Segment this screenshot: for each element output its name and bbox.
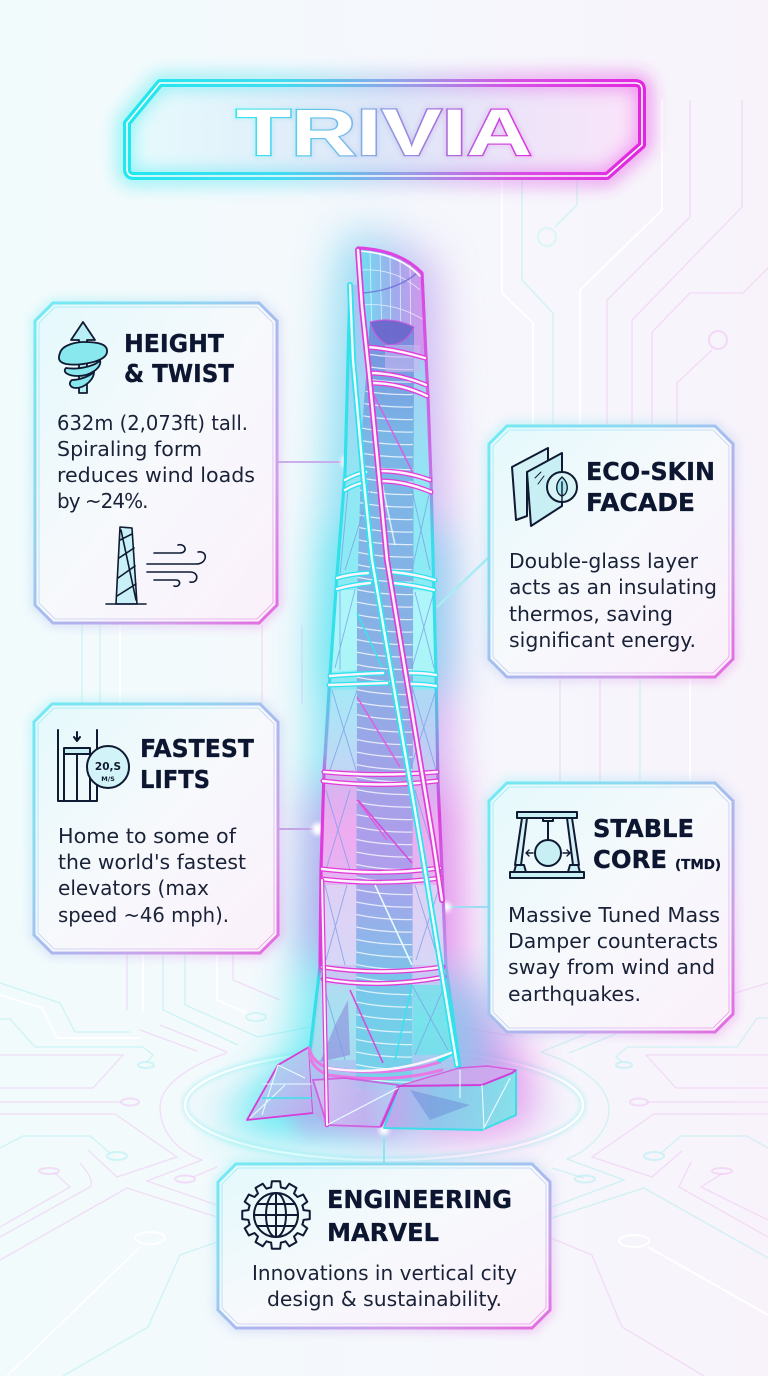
body text [57, 411, 255, 513]
tower illustration [247, 247, 516, 1130]
icon: double glass with leaf [512, 448, 577, 526]
body text: reduces wind loads [57, 463, 255, 487]
tower crown lattice [362, 250, 424, 350]
heading: & TWIST [124, 359, 234, 388]
body text: Damper counteracts [508, 929, 718, 953]
banner frame [127, 83, 642, 176]
heading [586, 457, 715, 517]
body text: design & sustainability. [267, 1287, 502, 1311]
tower crown [358, 248, 426, 357]
tower central core [356, 320, 414, 1090]
panel: height and twist [35, 303, 277, 623]
front base [313, 1078, 398, 1127]
icon: elevator and gauge: 20,S [95, 761, 121, 773]
body text: 632m (2,073ft) tall. [57, 411, 248, 435]
heading [140, 734, 254, 794]
heading: CORE [593, 845, 667, 874]
title banner [125, 81, 644, 178]
body text: significant energy. [509, 628, 696, 652]
core floor stripes [356, 345, 413, 1090]
body text: Innovations in vertical city [252, 1261, 517, 1285]
heading: STABLE [593, 814, 694, 843]
heading [327, 1185, 512, 1247]
body text [58, 824, 246, 927]
tower neon glow [247, 247, 516, 1135]
icon: elevator and gauge: M/S [101, 775, 115, 783]
heading [124, 329, 234, 388]
panel: eco-skin facade [489, 426, 733, 677]
heading: FASTEST [140, 734, 254, 763]
heading: ECO-SKIN [586, 457, 715, 486]
heading: LIFTS [140, 765, 210, 794]
core top dish [370, 320, 414, 345]
heading: HEIGHT [124, 329, 224, 358]
panel: engineering marvel [218, 1164, 550, 1328]
side braces [325, 490, 448, 1060]
body text [509, 549, 717, 652]
diagonal thin braces [350, 387, 413, 1063]
heading [593, 814, 721, 874]
tower crown opening [363, 273, 417, 293]
body text [252, 1261, 517, 1311]
heading: ENGINEERING [327, 1185, 512, 1214]
tower glass body [309, 247, 460, 1127]
body text: earthquakes. [508, 982, 641, 1006]
panel: stable core [489, 783, 733, 1032]
glass facets [312, 345, 456, 1062]
body text: Spiraling form [57, 437, 202, 461]
tower right plinth [327, 1066, 516, 1130]
body text: thermos, saving [509, 602, 673, 626]
icon: gear and globe [242, 1181, 310, 1249]
body text [508, 903, 720, 1006]
body text: Massive Tuned Mass [508, 903, 720, 927]
body text: speed ~46 mph). [58, 903, 229, 927]
body text: by ~24%. [57, 489, 147, 513]
tower platform rings [160, 1043, 609, 1167]
panel: fastest lifts [34, 704, 278, 953]
heading: MARVEL [327, 1218, 439, 1247]
body text: Double-glass layer [509, 549, 699, 573]
tower outer edges [310, 248, 460, 1068]
icon: tuned mass damper [510, 812, 584, 878]
title text: TRIVIA [236, 95, 532, 169]
banner glow [125, 81, 644, 178]
icon: elevator and gauge [58, 730, 129, 801]
heading: (TMD) [675, 858, 721, 873]
tower spiral neon stripes [322, 250, 457, 1125]
body text: the world's fastest [58, 850, 246, 874]
body text: Home to some of [58, 824, 237, 848]
body text: elevators (max [58, 876, 209, 900]
body text: sway from wind and [508, 955, 715, 979]
tower back plinth left [247, 1047, 313, 1120]
heading: FACADE [586, 488, 695, 517]
connector lines [277, 455, 489, 1164]
icon: tower and wind [106, 527, 205, 604]
banner fill [128, 84, 641, 175]
icon: twisting arrow [59, 322, 107, 393]
tower ring bands [309, 347, 453, 1079]
body text: acts as an insulating [509, 575, 717, 599]
